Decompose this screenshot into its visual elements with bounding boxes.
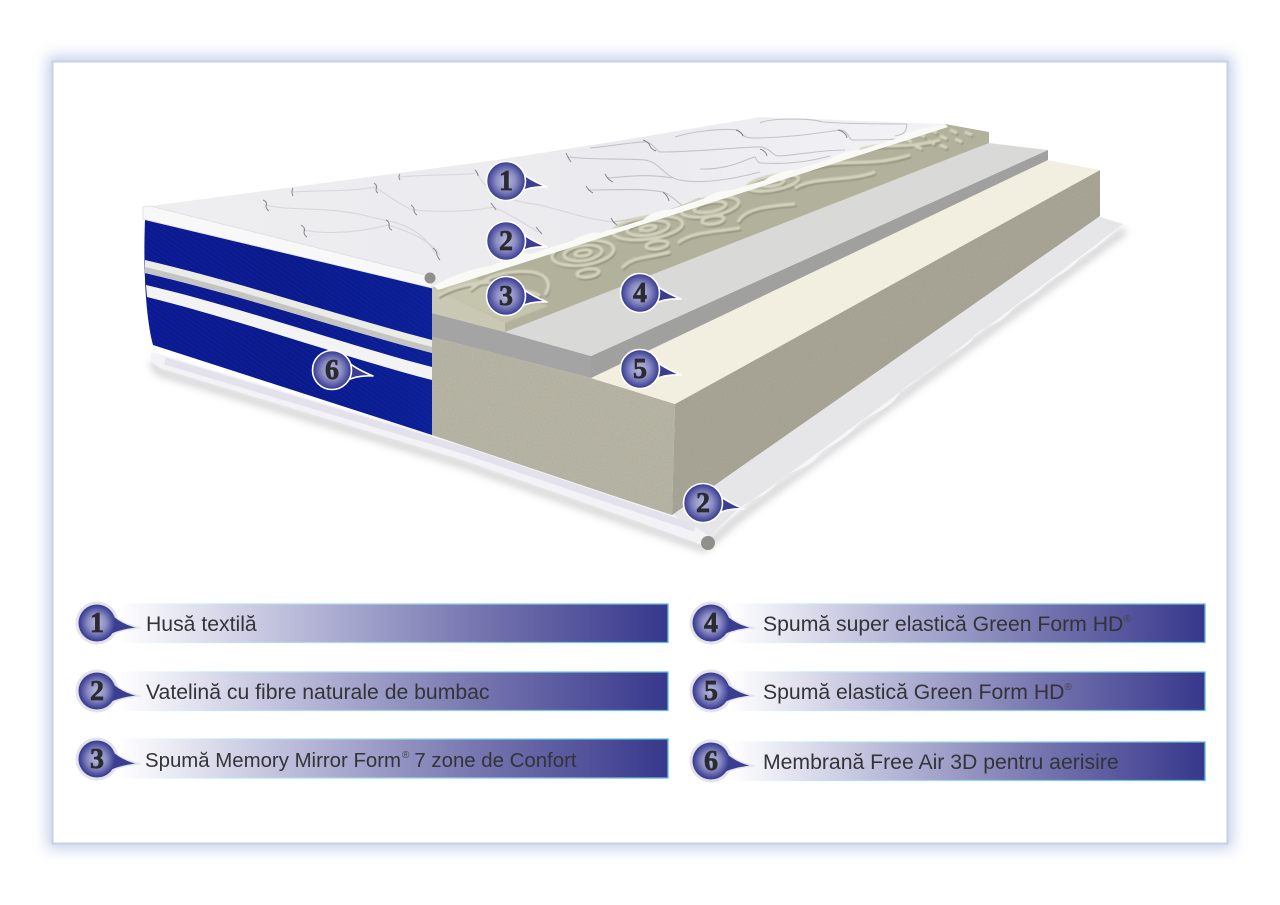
mattress cutaway illustration <box>143 117 1125 550</box>
callout badge 6: 6 <box>325 355 339 386</box>
callout badge 1 <box>486 162 547 200</box>
memory foam swirl relief <box>438 130 973 302</box>
legend item 4: 4 <box>704 608 718 639</box>
legend item 4: Spumă super elastică Green Form HD <box>763 613 1123 636</box>
callout badge 4: 4 <box>633 278 647 309</box>
callout badge 4 <box>620 274 681 312</box>
callout badge 5 <box>620 350 681 388</box>
legend item 3: 7 zone de Confort <box>414 750 577 772</box>
legend item 1: Husă textilă <box>146 613 257 636</box>
legend item 1: 1 <box>90 608 104 639</box>
callout badge 3 <box>486 276 547 316</box>
layer 4 super elastic foam <box>432 143 1048 378</box>
legend item 6: 6 <box>704 746 718 777</box>
legend right column <box>690 602 1205 782</box>
legend item 6: Membrană Free Air 3D pentru aerisire <box>763 751 1119 774</box>
callout badge 2 <box>486 222 547 260</box>
layer 5 elastic foam <box>432 160 1100 515</box>
legend item 3: ® <box>402 750 410 761</box>
callout badge 5: 5 <box>633 354 647 385</box>
legend item 1 <box>76 602 668 644</box>
layer 3 memory foam <box>424 124 989 332</box>
callout badge 3: 3 <box>499 281 513 312</box>
legend item 5: Spumă elastică Green Form HD <box>763 681 1064 704</box>
legend item 2: Vatelină cu fibre naturale de bumbac <box>146 681 490 704</box>
legend item 4: ® <box>1123 614 1131 625</box>
legend item 2 <box>76 670 668 712</box>
callout badge 2: 2 <box>499 226 513 257</box>
cut edge of cover <box>434 124 948 290</box>
legend item 4 <box>690 602 1205 644</box>
quilted cover top <box>143 117 945 288</box>
callout badge 6 <box>312 350 373 390</box>
callout badge 2 lower <box>684 484 744 522</box>
legend item 5 <box>690 670 1205 712</box>
ground shadow <box>152 230 1125 548</box>
legend item 2: 2 <box>90 676 104 707</box>
side panel blue mesh <box>144 220 432 435</box>
legend item 6 <box>690 740 1205 782</box>
bottom membrane and batting <box>150 216 1123 550</box>
legend item 5: ® <box>1064 682 1072 693</box>
legend item 5: 5 <box>704 676 718 707</box>
callout badge 2 lower: 2 <box>696 488 710 519</box>
legend item 3: Spumă Memory Mirror Form <box>145 750 401 772</box>
callout badge 1: 1 <box>499 166 513 197</box>
legend item 3: 3 <box>90 744 104 775</box>
legend item 3 <box>76 738 668 780</box>
legend left column <box>76 602 668 780</box>
